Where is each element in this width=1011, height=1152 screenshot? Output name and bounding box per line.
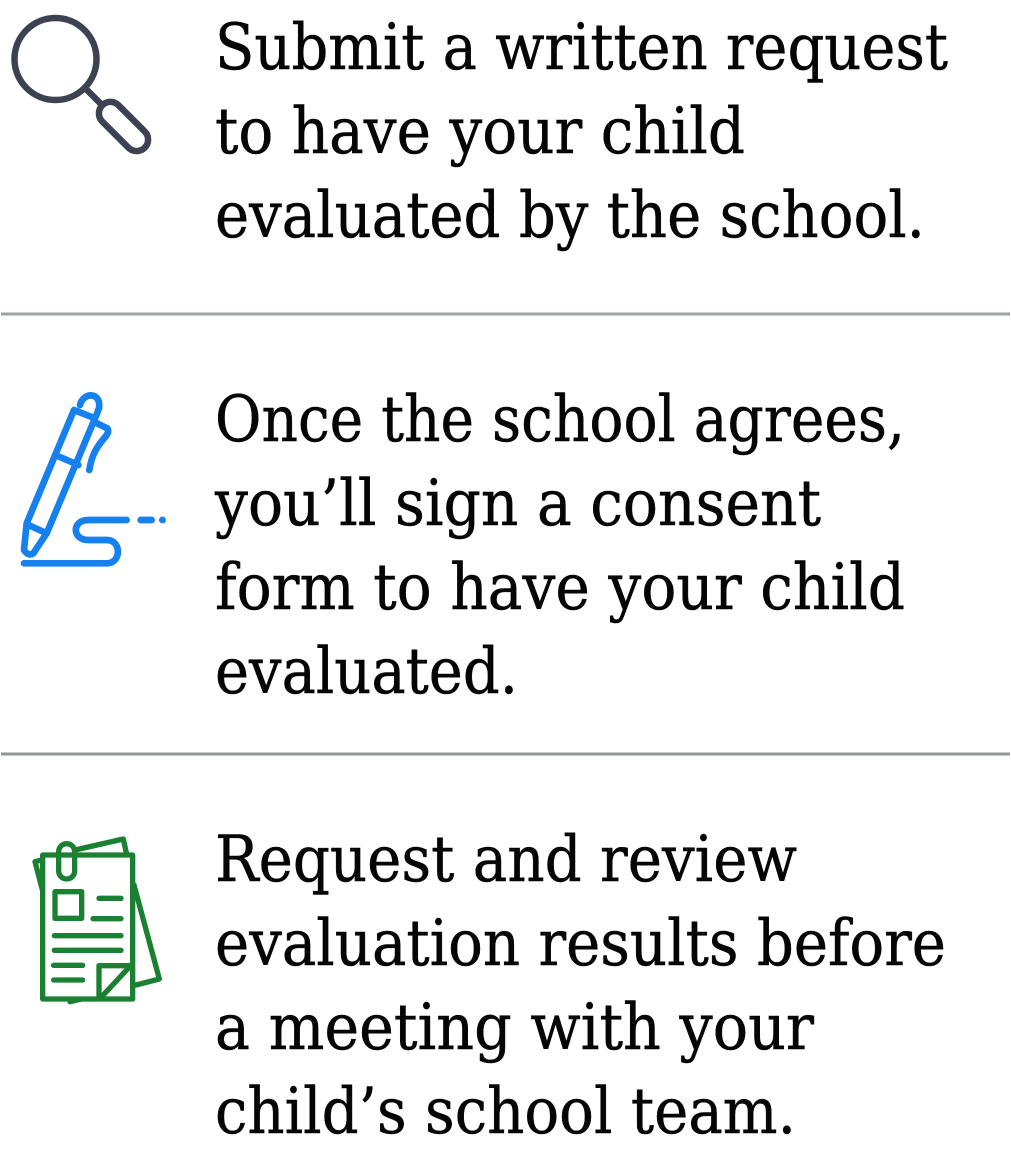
divider 2 — [1, 752, 1010, 756]
divider 1 — [1, 312, 1010, 316]
text: step 3: evaluation results before — [215, 907, 946, 981]
text: step 2 — [214, 383, 905, 709]
icon: magnifying glass — [14, 18, 153, 156]
text: step 3 — [215, 823, 946, 1149]
text: step 1: to have your child — [215, 95, 745, 169]
text: step 3: child’s school team. — [215, 1075, 796, 1149]
text: step 3: a meeting with your — [215, 991, 814, 1065]
icon: pen signing — [24, 395, 163, 563]
text: step 1 — [215, 11, 948, 253]
text: step 1: evaluated by the school. — [215, 179, 925, 253]
text: step 2: form to have your child — [215, 551, 905, 625]
text: step 3: Request and review — [215, 823, 797, 897]
text: step 2: you’ll sign a consent — [214, 467, 821, 541]
text: step 1: Submit a written request — [215, 11, 948, 85]
icon: clipped documents — [35, 839, 159, 1002]
text: step 2: Once the school agrees, — [215, 383, 905, 457]
text: step 2: evaluated. — [215, 635, 518, 709]
